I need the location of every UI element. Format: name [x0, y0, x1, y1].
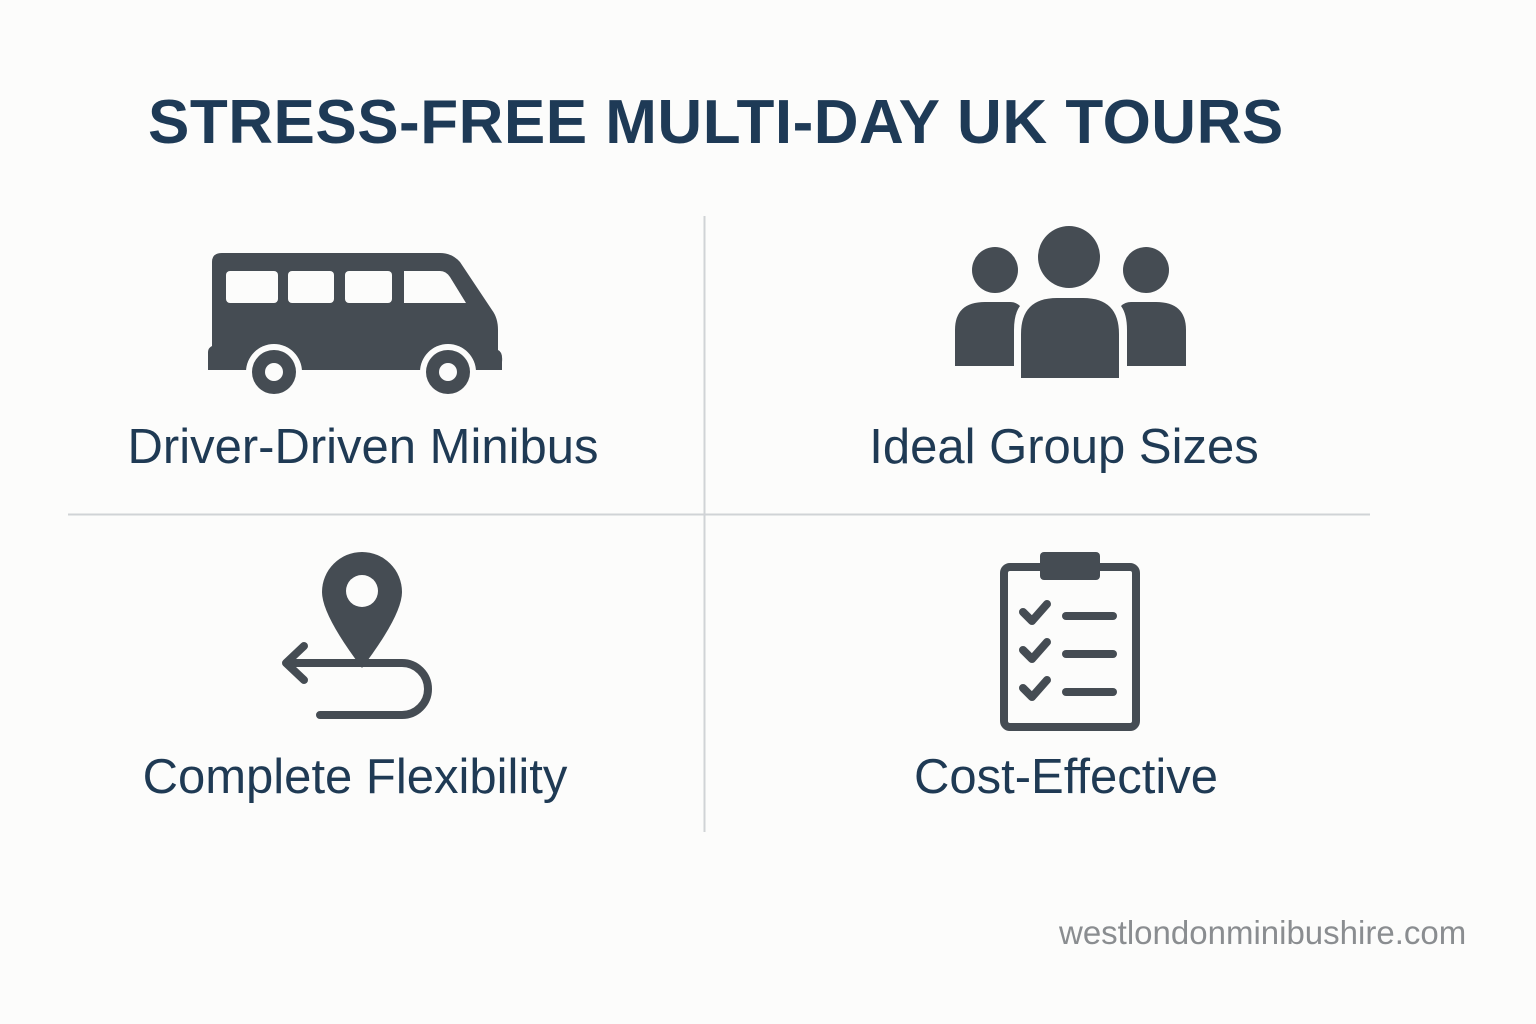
title: STRESS-FREE MULTI-DAY UK TOURS — [148, 88, 1284, 157]
icon: minibus — [208, 253, 502, 400]
icon: clipboard checklist — [1004, 552, 1136, 727]
label: Complete Flexibility: Complete Flexibility — [143, 750, 567, 804]
icon: location pin with route — [286, 552, 428, 715]
icon: group of people — [955, 226, 1186, 378]
watermark: westlondonminibushire.com — [1059, 914, 1466, 951]
label: Cost-Effective: Cost-Effective — [914, 750, 1218, 804]
label: Ideal Group Sizes: Ideal Group Sizes — [869, 420, 1259, 474]
label: Driver-Driven Minibus: Driver-Driven Minibus — [127, 420, 599, 474]
